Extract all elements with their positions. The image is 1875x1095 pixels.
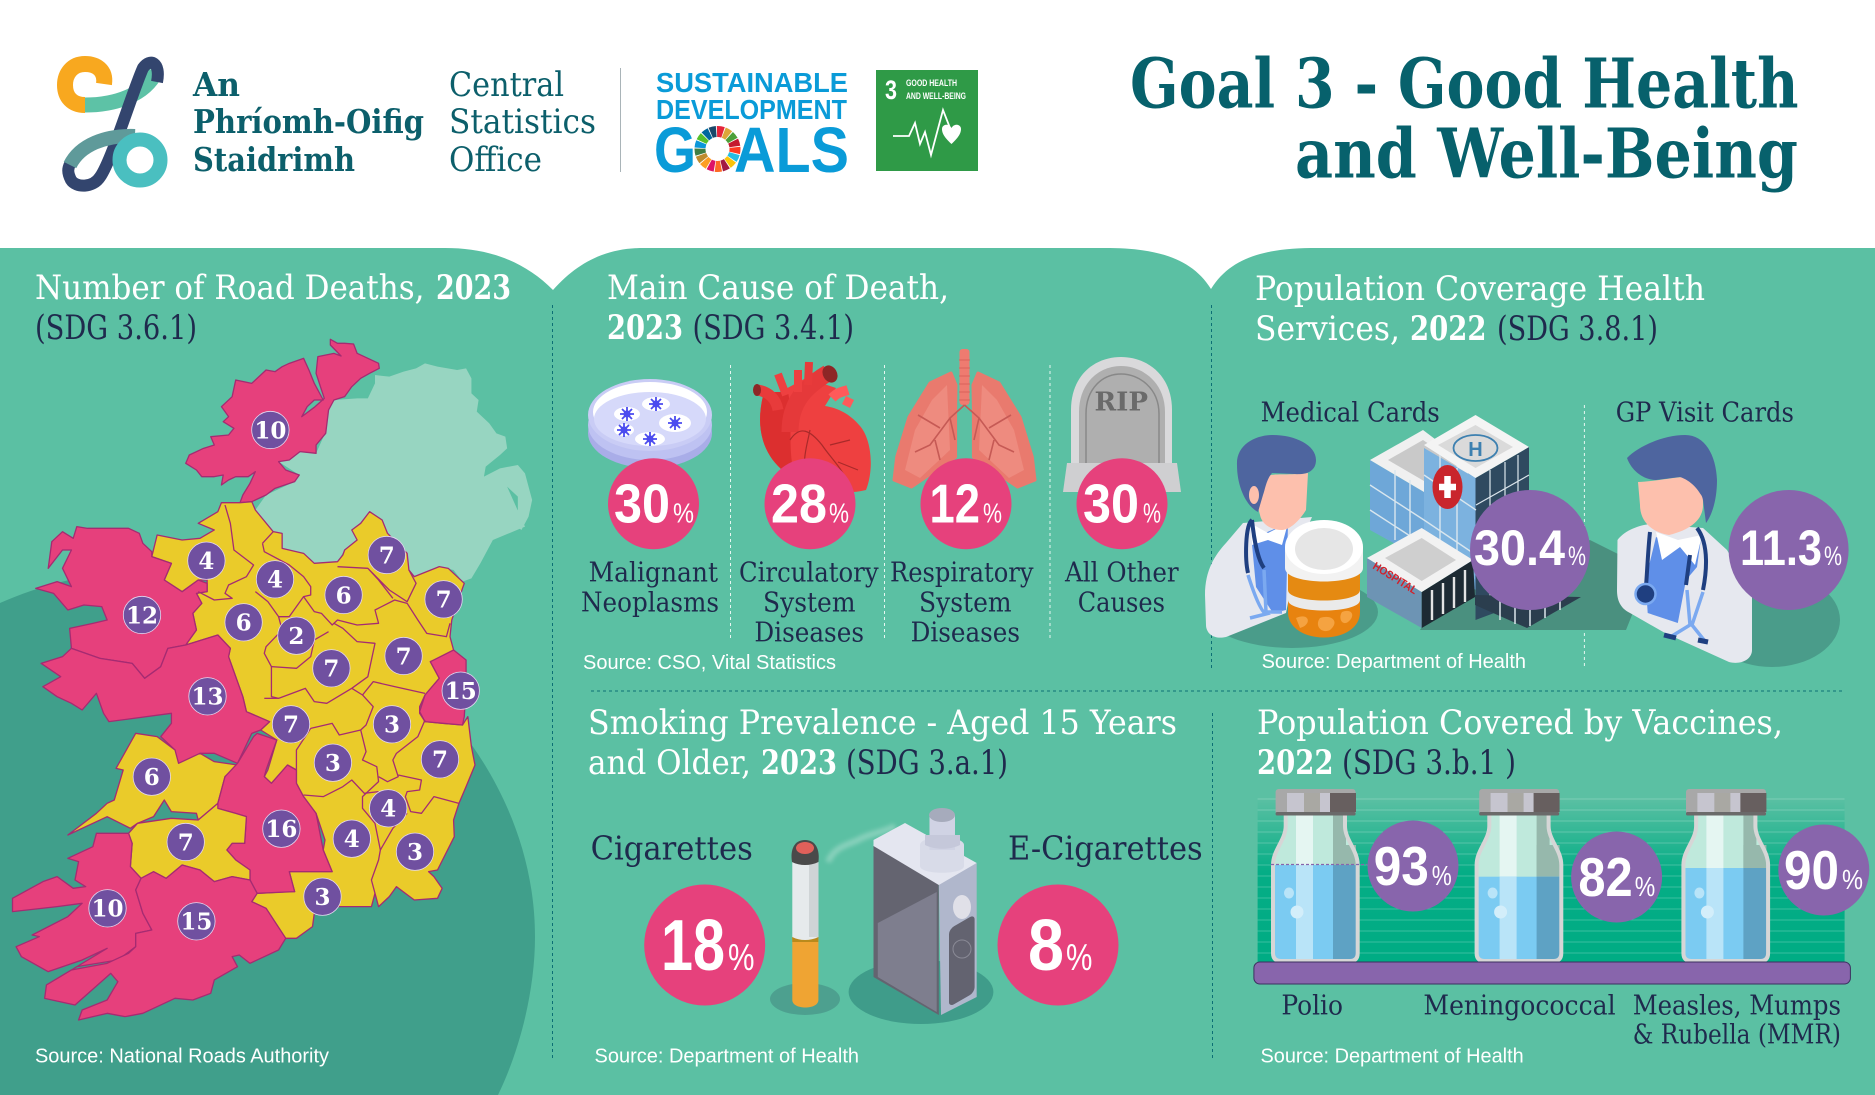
panel: road deaths (0, 268, 535, 1095)
source: population coverage: Source: Department of Health (1262, 651, 1526, 673)
vaccine labels: & Rubella (MMR) (1633, 1019, 1841, 1050)
logo: CSO mark (65, 63, 160, 186)
heading: vaccines: (SDG 3.b.1 ) (1342, 743, 1516, 783)
stat: 93% polio: 93 (1374, 835, 1429, 897)
Mayo (36, 527, 207, 678)
icon: lungs (894, 349, 1035, 487)
heading: smoking prevalence: and Older, (588, 743, 751, 783)
stat: 93% polio (1368, 820, 1458, 912)
heading: population coverage: Services, (1255, 309, 1400, 349)
vaccine labels: Meningococcal (1423, 990, 1616, 1021)
stat: 12% respiratory: Respiratory (890, 558, 1034, 589)
stat: 18% cigarettes (644, 884, 765, 1006)
title (1130, 44, 1798, 194)
icon: cigarette (770, 826, 895, 1015)
stat: 11.3% GP visit cards (1729, 490, 1849, 610)
heading: road deaths (35, 268, 511, 348)
yellow counties north, midlands and east (152, 502, 475, 938)
heading: population coverage (1255, 269, 1705, 349)
logo: English name: Office (449, 140, 542, 180)
map county values: 13 (191, 684, 224, 711)
logo: Sustainable Development Goals (654, 67, 849, 186)
stat: 30% other causes: All Other (1064, 558, 1179, 589)
heading: population coverage: Population Coverage Health (1255, 269, 1705, 309)
icon: gravestone: RIP (1094, 388, 1148, 418)
heading: smoking prevalence: (SDG 3.a.1) (846, 743, 1008, 783)
Northern Ireland (255, 363, 532, 582)
map county values: 7 (396, 643, 412, 670)
heading: road deaths: 2023 (436, 268, 511, 308)
striped backdrop (1258, 798, 1845, 962)
label: cigarettes: Cigarettes (591, 828, 753, 867)
stat: 82% meningococcal: % (1635, 871, 1655, 902)
stat: 82% meningococcal: 82 (1578, 846, 1633, 908)
panel: cause of death (581, 268, 1181, 674)
map county values: 7 (436, 587, 452, 614)
darker teal hill behind the map (0, 570, 535, 1095)
stat: 30% malignant neoplasms: % (673, 498, 694, 529)
stat: 28% circulatory: System (763, 588, 856, 619)
map county values: 4 (380, 796, 396, 823)
heading: smoking prevalence (588, 703, 1177, 783)
map county values: 6 (236, 610, 252, 637)
heading: smoking prevalence: Smoking Prevalence - Aged 15 Years (588, 703, 1177, 743)
source: vaccines: Source: Department of Health (1260, 1046, 1524, 1068)
stat: 28% circulatory: Diseases (754, 618, 864, 649)
heading: vaccines: Population Covered by Vaccines, (1257, 703, 1783, 743)
stat: 90% MMR (1778, 824, 1869, 916)
map of Ireland by county (12, 339, 532, 1020)
stat: 12% respiratory: % (983, 498, 1002, 529)
Kerry (12, 833, 152, 972)
map county values: 6 (144, 764, 160, 791)
map county values: 10 (254, 418, 286, 444)
map county values: 2 (288, 623, 304, 650)
icon: SDG 3 tile (876, 70, 978, 171)
teal background (0, 248, 1875, 1095)
panel: population coverage (1205, 269, 1849, 673)
icon: gravestone (1063, 357, 1181, 492)
stat: 30% other causes (1064, 458, 1179, 619)
stat: 30% other causes: 30 (1083, 473, 1139, 535)
stat: 11.3% GP visit cards: 11.3 (1740, 520, 1822, 576)
icon: doctor with stethoscope (1617, 435, 1840, 667)
yellow county borders (198, 505, 459, 893)
map county values: 15 (445, 678, 477, 705)
stat: 18% cigarettes: % (728, 937, 754, 978)
header logos (65, 63, 978, 186)
icon: e-cigarette (849, 808, 993, 1024)
map county values: 10 (91, 896, 124, 923)
Donegal (186, 339, 379, 503)
icon: doctor with pill bottle (1205, 435, 1378, 648)
source: smoking: Source: Department of Health (594, 1046, 859, 1068)
panel: smoking prevalence (588, 703, 1203, 1068)
Clare (68, 733, 237, 835)
heading: cause of death: Main Cause of Death, (607, 268, 949, 308)
label: medical cards: Medical Cards (1261, 398, 1440, 429)
label: GP visit cards: GP Visit Cards (1616, 398, 1794, 429)
stat: 28% circulatory: 28 (771, 473, 827, 535)
vial: meningococcal (1477, 789, 1561, 961)
stat: 30% malignant neoplasms: Neoplasms (581, 588, 719, 619)
stat: 93% polio: % (1432, 860, 1452, 891)
stat: 8% e-cigarettes: % (1066, 937, 1092, 978)
icon: hospital (1367, 415, 1650, 630)
icon: hospital: H (1468, 439, 1483, 461)
icon: SDG 3 tile: 3 (885, 75, 897, 105)
title: and Well-Being (1295, 114, 1798, 194)
map county values: 3 (384, 712, 400, 739)
vaccine labels (1281, 990, 1841, 1050)
stat: 30% other causes: Causes (1078, 588, 1165, 619)
stat: 11.3% GP visit cards: % (1824, 541, 1842, 571)
icon: petri dish (588, 379, 712, 468)
map county values: 4 (267, 567, 283, 594)
map county values: 16 (265, 816, 297, 843)
logo: English name (449, 65, 596, 180)
map county values: 3 (407, 839, 423, 866)
map county values: 7 (283, 712, 299, 739)
logo: Sustainable Development Goals: G (654, 114, 696, 186)
stat: 30% other causes: % (1143, 498, 1161, 529)
stat: 28% circulatory (739, 458, 879, 649)
map county values: 7 (379, 542, 395, 569)
Limerick (129, 803, 250, 882)
stat: 18% cigarettes: 18 (661, 906, 725, 986)
Dublin (420, 650, 466, 725)
stat: 28% circulatory: Circulatory (739, 558, 879, 589)
stat: 30% malignant neoplasms: Malignant (589, 558, 718, 589)
vial: polio (1273, 789, 1358, 961)
vaccine labels: Polio (1281, 990, 1343, 1021)
map county values (89, 411, 479, 940)
logo: Sustainable Development Goals: ALS (734, 114, 849, 186)
map county values: 7 (432, 747, 448, 774)
logo: Irish name: An (192, 65, 240, 104)
stat: 12% respiratory: System (919, 588, 1012, 619)
stat: 30.4% medical cards: % (1568, 541, 1586, 571)
Cork (45, 865, 286, 1020)
shelf (1254, 962, 1850, 984)
stat: 90% MMR: 90 (1784, 839, 1839, 901)
heading: cause of death: (SDG 3.4.1) (692, 308, 854, 348)
source: road deaths: Source: National Roads Authority (35, 1045, 329, 1067)
map county values: 6 (336, 582, 352, 609)
stat: 90% MMR: % (1842, 864, 1863, 895)
label: e-cigarettes: E-Cigarettes (1008, 828, 1203, 867)
stat: 12% respiratory: Diseases (911, 618, 1020, 649)
logo: Sustainable Development Goals: SUSTAINABLE (656, 67, 848, 98)
map county values: 3 (314, 884, 331, 911)
stat: 30.4% medical cards (1470, 490, 1590, 610)
heading: road deaths: Number of Road Deaths, (35, 268, 424, 308)
logo: Irish name: Phríomh-Oifig (193, 102, 424, 141)
stat: 8% e-cigarettes: 8 (1028, 906, 1064, 986)
icon: SDG 3 tile: AND WELL-BEING (906, 91, 966, 102)
heading: vaccines (1257, 703, 1783, 783)
map county values: 15 (180, 909, 212, 936)
logo: Sustainable Development Goals: DEVELOPMENT (656, 94, 847, 125)
stat: 82% meningococcal (1571, 832, 1662, 922)
logo: Irish name (192, 65, 424, 179)
map county values: 7 (178, 829, 194, 856)
stat: 28% circulatory: % (829, 498, 849, 529)
Tipperary (218, 733, 332, 893)
vial: MMR (1683, 789, 1768, 961)
heading: population coverage: (SDG 3.8.1) (1497, 309, 1658, 349)
heading: road deaths: (SDG 3.6.1) (35, 308, 197, 348)
stat: 12% respiratory (890, 458, 1034, 649)
logo: English name: Statistics (449, 102, 596, 142)
icon: heart (753, 362, 871, 492)
stat: 8% e-cigarettes (998, 884, 1118, 1006)
heading: population coverage: 2022 (1410, 309, 1486, 349)
map county values: 3 (325, 750, 341, 777)
heading: vaccines: 2022 (1257, 743, 1334, 783)
stat: 30% malignant neoplasms: 30 (614, 473, 670, 535)
stat: 12% respiratory: 12 (930, 473, 980, 535)
stat: 30.4% medical cards: 30.4 (1474, 520, 1565, 576)
stat: 30% malignant neoplasms (581, 458, 719, 619)
icon: hospital: HOSPITAL (1370, 560, 1419, 597)
logo: English name: Central (449, 65, 564, 105)
heading: cause of death (607, 268, 949, 348)
map county values: 12 (126, 602, 158, 629)
Galway (41, 635, 270, 765)
source: cause of death: Source: CSO, Vital Statistics (583, 652, 836, 674)
map county values: 4 (198, 548, 214, 575)
vaccine labels: Measles, Mumps (1633, 990, 1841, 1021)
map county values: 7 (323, 656, 339, 683)
logo: Irish name: Staidrimh (193, 140, 355, 179)
icon: SDG 3 tile: GOOD HEALTH (906, 78, 957, 89)
heading: smoking prevalence: 2023 (761, 743, 837, 783)
heading: cause of death: 2023 (607, 308, 683, 348)
panel: vaccines (1254, 703, 1869, 1068)
map county values: 4 (344, 826, 360, 853)
